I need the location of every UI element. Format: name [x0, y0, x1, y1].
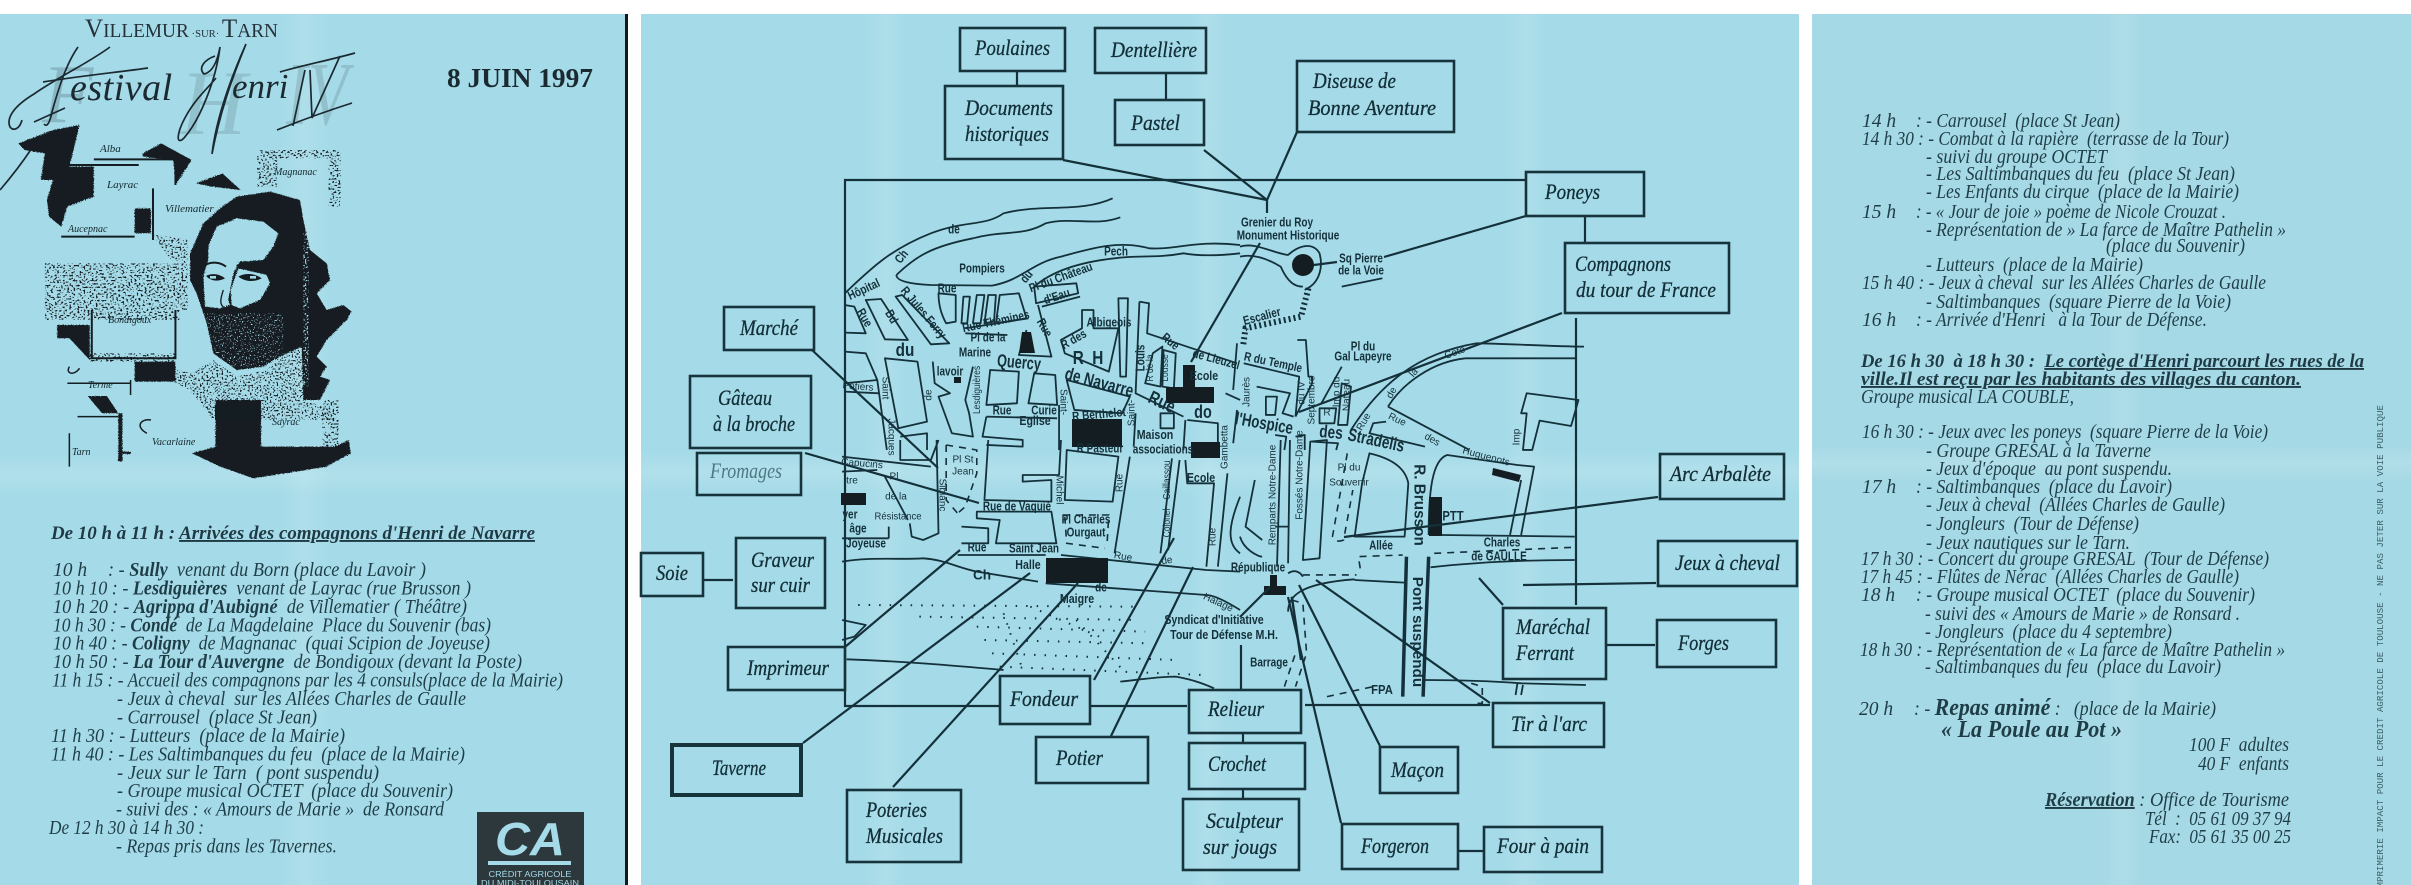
arrivals list: 10 h 10 : - Lesdiguières venant de Layrac (rue Brusson ) — [53, 578, 471, 599]
box: Documents historiques: historiques — [965, 121, 1049, 146]
map street labels: FPA — [1371, 683, 1393, 697]
box: Jeux à cheval — [1658, 541, 1797, 586]
late afternoon schedule: 17 h 45 : - Flûtes de Nérac (Allées Charles de Gaulle) — [1861, 567, 2239, 588]
map street labels: du — [1018, 268, 1036, 286]
map street labels: Escalier — [1242, 306, 1283, 328]
map street labels: yer — [843, 508, 858, 522]
village names: Villematier — [165, 203, 214, 215]
map street labels: Halage — [1201, 591, 1235, 615]
attraction labels — [641, 28, 1797, 872]
afternoon schedule: - Saltimbanques (square Pierre de la Voie) — [1926, 292, 2231, 313]
afternoon schedule: : - Carrousel (place St Jean) — [1916, 111, 2120, 132]
map street labels: Quercy — [996, 351, 1042, 375]
box: Soie: Soie — [656, 560, 688, 585]
map street labels: do — [1194, 401, 1212, 423]
map street labels: Maison — [1137, 428, 1173, 442]
map street labels: Monument Historique — [1237, 229, 1339, 243]
map street labels: Rue — [1145, 387, 1179, 417]
arrivals list: De 12 h 30 à 14 h 30 : — [48, 818, 204, 839]
morning programme text — [48, 523, 563, 858]
arrivals list: - Carrousel (place St Jean) — [117, 708, 317, 728]
arrivals list: 10 h 30 : - Condé de La Magdelaine Place du Souvenir (bas) — [53, 615, 491, 636]
map street labels: Pont suspendu — [1409, 577, 1425, 687]
street map — [842, 198, 1586, 703]
map street labels: R — [1323, 408, 1331, 418]
map street labels: R de la — [1145, 354, 1155, 381]
map street labels: Barrage — [1250, 656, 1288, 670]
map street labels: Saint Jean — [1009, 542, 1059, 556]
map street labels: Rue — [1113, 550, 1133, 564]
box: Potier: Potier — [1055, 745, 1103, 770]
arrivals list: 10 h 40 : - Coligny de Magnanac (quai Scipion de Joyeuse) — [53, 634, 490, 655]
late afternoon schedule: - Groupe GRESAL à la Taverne — [1926, 441, 2151, 462]
box: Gâteau à la broche — [690, 376, 811, 448]
map street labels: Jean — [952, 466, 974, 478]
festival title script — [0, 44, 355, 190]
arrivals list: 10 h 20 : - Agrippa d'Aubigné de Villematier ( Théâtre) — [53, 597, 467, 618]
map street labels: de Lieuzel — [1191, 347, 1241, 373]
map street labels: Louis — [1134, 345, 1148, 371]
map street labels: Fossés Notre-Dame — [1294, 430, 1306, 520]
map street labels: Rue — [854, 307, 874, 329]
box: Graveur sur cuir: sur cuir — [751, 572, 810, 597]
map street labels: l'Hospice — [1234, 409, 1295, 439]
map street labels: Septembre — [1306, 375, 1318, 424]
evening meal — [1859, 695, 2289, 775]
map street labels: la — [1407, 366, 1421, 380]
box: Graveur sur cuir — [736, 538, 825, 608]
map street labels: Pl St — [952, 454, 974, 466]
arrivals list: - Jeux sur le Tarn ( pont suspendu) — [117, 763, 379, 784]
map street labels: Albigeois — [1087, 316, 1131, 330]
procession heading: De 16 h 30 à 18 h 30 : Le cortège d'Henri parcourt les rues de la — [1860, 351, 2364, 372]
map street labels: Caillassou — [1162, 460, 1172, 500]
map street labels: Rue — [1208, 527, 1218, 546]
late afternoon schedule: 18 h — [1861, 585, 1895, 606]
map street labels: de la — [885, 492, 907, 502]
box: Imprimeur — [728, 647, 845, 690]
map street labels: Hôpital — [846, 277, 882, 303]
map street labels: Syndicat d'Initiative — [1164, 613, 1264, 627]
box: Arc Arbalète — [1660, 454, 1784, 499]
afternoon schedule: 15 h — [1862, 202, 1896, 223]
map frame — [845, 180, 1576, 706]
village names: Tarn — [72, 447, 91, 458]
box: Four à pain — [1484, 827, 1602, 872]
procession heading: ville.Il est reçu par les habitants des villages du canton. — [1861, 369, 2301, 390]
map street labels: Lesdiguières — [972, 366, 982, 414]
map street labels: R du Temple — [1243, 350, 1303, 376]
map street labels: Rue — [938, 282, 956, 296]
logo: Crédit Agricole du Midi-Toulousain — [477, 812, 584, 885]
box: Forges: Forges — [1677, 630, 1729, 655]
late afternoon schedule: - suivi des « Amours de Marie » de Ronsard . — [1925, 604, 2240, 625]
box: Forgeron — [1342, 824, 1458, 869]
map street labels: R. Brusson — [1411, 464, 1427, 546]
box: Crochet: Crochet — [1208, 751, 1267, 776]
box: Maréchal Ferrant — [1503, 608, 1606, 679]
map street labels: Rue Thémines — [961, 308, 1031, 336]
box: Sculpteur sur jougs — [1183, 799, 1299, 870]
map street labels: Maigre — [1060, 592, 1095, 606]
map street labels: Rue — [1034, 317, 1054, 339]
box: Sculpteur sur jougs: Sculpteur — [1206, 808, 1283, 833]
map street labels: Nateau — [1342, 379, 1352, 411]
box: Tir à l'arc — [1493, 703, 1604, 747]
map street labels: Siblanc — [936, 479, 948, 511]
map street labels: tre — [846, 476, 858, 486]
reservation contact — [2044, 790, 2291, 848]
map street labels: Ch — [893, 248, 911, 266]
map street labels: Pl du Château — [1027, 260, 1095, 296]
box: Compagnons du tour de France — [1565, 243, 1729, 313]
box: Poulaines — [960, 28, 1065, 71]
map street labels: Pompiers — [959, 262, 1005, 276]
map street labels: Lousse — [1160, 354, 1170, 382]
map street labels: Grenier du Roy — [1241, 216, 1314, 230]
map street labels: Ourgaut — [1067, 526, 1106, 540]
map street labels: Pl de la — [971, 331, 1006, 345]
box: Jeux à cheval: Jeux à cheval — [1675, 550, 1780, 575]
festival title script: F — [41, 48, 95, 141]
map street labels: de la Voie — [1338, 264, 1384, 278]
village names — [67, 143, 317, 458]
map street labels: Curie — [1031, 404, 1057, 418]
panel: festival cover and morning programme — [0, 14, 628, 885]
reservation contact: Fax: 05 61 35 00 25 — [2148, 827, 2291, 848]
map street labels: du — [896, 340, 914, 360]
village names: Layrac — [106, 179, 138, 191]
evening meal: 20 h — [1859, 699, 1893, 720]
arrivals list: - suivi des : « Amours de Marie » de Ronsard — [116, 800, 444, 821]
map street labels: R Berthelot — [1072, 406, 1127, 424]
box: Poteries Musicales: Musicales — [865, 823, 943, 848]
map street labels: Sq Pierre — [1339, 252, 1383, 266]
map street labels: de Navarre — [1063, 365, 1136, 401]
map street labels: Stradelis — [1346, 426, 1406, 456]
box: Maçon — [1380, 747, 1458, 793]
arrivals list — [48, 560, 563, 858]
late afternoon schedule: 16 h 30 : - Jeux avec les poneys (square Pierre de la Voie) — [1862, 422, 2268, 443]
village names: Terme — [88, 380, 113, 391]
box: Poteries Musicales — [847, 790, 961, 862]
festival title script: H — [179, 52, 251, 154]
map street labels: Pl du — [1338, 462, 1360, 474]
evening meal: 100 F adultes — [2189, 735, 2289, 756]
box: Fondeur — [1000, 676, 1090, 724]
map street labels: R Pasteur — [1077, 442, 1124, 456]
map street labels: Souvenir — [1329, 478, 1369, 488]
arrivals list: - Repas pris dans les Tavernes. — [116, 836, 337, 858]
map street labels: Gambetta — [1220, 425, 1230, 469]
map street labels: Résistance — [875, 511, 921, 523]
box: Fondeur: Fondeur — [1009, 686, 1078, 711]
box: Graveur sur cuir: Graveur — [751, 547, 814, 572]
panel: afternoon and evening programme — [1812, 14, 2411, 885]
arrivals list: - Jeux à cheval sur les Allées Charles de Gaulle — [117, 689, 466, 710]
late afternoon schedule — [1860, 422, 2285, 678]
evening meal: : - Repas animé : (place de la Mairie) — [1914, 695, 2216, 721]
map street labels: âge — [849, 522, 867, 536]
box: Poulaines: Poulaines — [974, 35, 1050, 60]
head, beard and ruff — [170, 192, 352, 420]
arrivals list: - Groupe musical OCTET (place du Souvenir) — [117, 781, 453, 802]
logo: Crédit Agricole du Midi-Toulousain: CA — [495, 813, 565, 865]
village names: Sayrac — [272, 417, 300, 428]
afternoon schedule: - Représentation de » La farce de Maître Pathelin » — [1926, 220, 2286, 241]
afternoon schedule: - Les Enfants du cirque (place de la Mairie) — [1926, 182, 2239, 203]
map street labels: Marine — [959, 346, 991, 360]
arrivals list: 11 h 30 : - Lutteurs (place de la Mairie) — [51, 726, 345, 747]
map street labels: Ecole — [1187, 471, 1216, 485]
map street labels: Pl — [890, 472, 898, 482]
box: Arc Arbalète: Arc Arbalète — [1668, 461, 1771, 486]
evening meal: « La Poule au Pot » — [1941, 717, 2122, 743]
box: Documents historiques: Documents — [964, 95, 1053, 120]
afternoon schedule: - suivi du groupe OCTET — [1926, 147, 2108, 168]
map street labels: Halle — [1015, 558, 1041, 572]
box: Gâteau à la broche: Gâteau — [718, 385, 772, 410]
map street labels: associations — [1133, 443, 1193, 457]
box: Pastel — [1115, 100, 1204, 145]
afternoon schedule: (place du Souvenir) — [2106, 236, 2245, 257]
panel: town map with attraction labels — [641, 14, 1799, 885]
village names: Bondigoux — [108, 315, 152, 326]
map street labels: République — [1231, 561, 1285, 575]
map street labels: Rue — [1159, 331, 1181, 353]
box: Maçon: Maçon — [1390, 757, 1444, 782]
village sketch and torn-paper texture — [45, 150, 341, 447]
map street labels: Pl du — [1351, 340, 1375, 354]
box: Diseuse de Bonne Aventure: Diseuse de — [1312, 68, 1396, 93]
logo: Crédit Agricole du Midi-Toulousain: CRÉDIT AGRICOLE — [488, 869, 572, 879]
box: Fromages: Fromages — [709, 458, 782, 483]
festival title script: estival — [70, 67, 173, 109]
map street labels: Potiers — [842, 380, 874, 394]
box: Maréchal Ferrant: Ferrant — [1515, 640, 1575, 665]
box: Soie — [641, 553, 703, 596]
afternoon schedule: : - Arrivée d'Henri à la Tour de Défense. — [1916, 310, 2207, 331]
map street labels: Imp du — [1332, 377, 1342, 407]
box: Pastel: Pastel — [1130, 110, 1180, 135]
map street labels: Pl Charles — [1062, 513, 1110, 527]
village names: Aucepnac — [67, 224, 108, 235]
afternoon schedule: 14 h — [1862, 111, 1896, 132]
village names: Vacarlaine — [152, 437, 196, 448]
arrivals list: : - Sully venant du Born (place du Lavoir ) — [108, 560, 426, 581]
afternoon schedule: 14 h 30 : - Combat à la rapière (terrasse de la Tour) — [1862, 129, 2229, 150]
afternoon schedule: : - « Jour de joie » poème de Nicole Crouzat . — [1916, 202, 2226, 223]
map street labels: Remparts Notre-Dame — [1268, 444, 1278, 545]
map street labels: Pech — [1104, 245, 1128, 259]
map street labels: Saint- — [1126, 400, 1138, 426]
map street labels: Rue de Vaquié — [983, 500, 1051, 514]
late afternoon schedule: - Jeux nautiques sur le Tarn. — [1926, 533, 2130, 554]
late afternoon schedule: - Saltimbanques du feu (place du Lavoir) — [1925, 657, 2221, 678]
map street labels: Jaurès — [1242, 377, 1252, 407]
afternoon schedule — [1862, 111, 2286, 331]
connector lines — [703, 71, 1658, 851]
box: Marché: Marché — [739, 315, 799, 340]
arrivals list: 11 h 40 : - Les Saltimbanques du feu (place de la Mairie) — [51, 744, 465, 765]
map street labels: R des — [1059, 327, 1089, 353]
box: Taverne: Taverne — [712, 755, 766, 780]
afternoon schedule: 15 h 40 : - Jeux à cheval sur les Allées Charles de Gaulle — [1862, 273, 2266, 294]
map street labels: PTT — [1442, 508, 1464, 524]
map street labels: Ecole — [1190, 369, 1219, 383]
arrivals list: 11 h 15 : - Accueil des compagnons par les 4 consuls(place de la Mairie) — [52, 671, 563, 692]
box: Poteries Musicales: Poteries — [865, 797, 927, 822]
box: Fromages — [697, 453, 801, 495]
map street labels: Allée — [1369, 539, 1393, 553]
box: Forges — [1657, 620, 1776, 667]
map street labels: Imp — [1512, 428, 1522, 445]
box: Diseuse de Bonne Aventure: Bonne Aventure — [1308, 95, 1436, 120]
map street labels: Jacques — [886, 418, 896, 456]
box: Diseuse de Bonne Aventure — [1297, 61, 1454, 132]
town name: VILLEMUR ·SUR· TARN — [85, 14, 278, 43]
late afternoon schedule: - Jeux à cheval (Allées Charles de Gaulle) — [1926, 495, 2225, 516]
village names: Alba — [99, 143, 121, 155]
map street labels: de — [924, 389, 934, 401]
evening meal: 40 F enfants — [2198, 754, 2289, 775]
map buildings — [841, 254, 1521, 595]
map street labels: Côte — [1443, 344, 1467, 362]
map street labels: Michel — [1054, 476, 1064, 504]
festival title script: enri — [232, 67, 288, 106]
festival title script: IV — [285, 45, 355, 144]
map street labels: Eglise — [1019, 414, 1051, 428]
box: Maréchal Ferrant: Maréchal — [1515, 614, 1590, 639]
box: Poneys: Poneys — [1544, 179, 1600, 204]
map street labels: de — [1384, 385, 1400, 401]
late afternoon schedule: - Jeux d'époque au pont suspendu. — [1926, 459, 2172, 480]
reservation contact: Réservation : Office de Tourisme — [2044, 790, 2289, 811]
map street labels: Joyeuse — [846, 537, 886, 551]
map street labels: lavoir — [937, 365, 964, 379]
map street labels: Bd — [882, 308, 900, 326]
late afternoon schedule: : - Saltimbanques (place du Lavoir) — [1916, 477, 2172, 498]
map street labels: du IV — [1296, 381, 1308, 405]
map street labels: d'Eau — [1042, 287, 1072, 307]
box: Dentellière: Dentellière — [1110, 37, 1197, 62]
date: 8 JUIN 1997 — [447, 63, 593, 93]
afternoon schedule: 16 h — [1862, 310, 1896, 331]
box: Compagnons du tour de France: du tour de France — [1576, 277, 1716, 302]
map street labels: des — [1319, 422, 1344, 444]
box: Relieur — [1189, 690, 1301, 733]
map street labels: de GAULLE — [1471, 550, 1527, 564]
box: Four à pain: Four à pain — [1496, 833, 1589, 858]
late afternoon schedule: 18 h 30 : - Représentation de « La farce de Maître Pathelin » — [1860, 640, 2285, 661]
box: Forgeron: Forgeron — [1360, 833, 1429, 858]
map street labels: Ch — [973, 567, 991, 583]
map street labels: Charles — [1484, 536, 1520, 550]
box: Potier — [1036, 737, 1148, 783]
late afternoon schedule: 17 h 30 : - Concert du groupe GRESAL (Tour de Défense) — [1861, 549, 2269, 570]
late afternoon schedule: 17 h — [1862, 477, 1896, 498]
box: Dentellière — [1095, 28, 1206, 73]
box: Compagnons du tour de France: Compagnons — [1575, 251, 1671, 276]
box: Marché — [724, 307, 814, 350]
box: Imprimeur: Imprimeur — [746, 655, 829, 680]
printer note: IMPRIMERIE IMPACT POUR LE CREDIT AGRICOLE DE TOULOUSE - NE PAS JETER SUR LA VOIE PUBLIQUE — [2375, 405, 2386, 885]
map street labels: de — [1095, 581, 1107, 595]
procession heading: Groupe musical LA COUBLE, — [1861, 387, 2074, 408]
map street labels: Saint- — [1058, 389, 1068, 415]
procession heading — [1860, 351, 2364, 408]
map street labels: Tour de Défense M.H. — [1170, 628, 1278, 642]
box: Documents historiques — [945, 86, 1063, 159]
reservation contact: Tél : 05 61 09 37 94 — [2145, 809, 2291, 830]
village names: Magnanac — [273, 167, 317, 178]
late afternoon schedule: - Jongleurs (Tour de Défense) — [1926, 514, 2139, 535]
box: Tir à l'arc: Tir à l'arc — [1511, 711, 1587, 736]
map street labels: Rue — [1114, 473, 1126, 492]
box: Relieur: Relieur — [1207, 696, 1264, 721]
map street labels: Rue — [968, 541, 986, 555]
late afternoon schedule: - Jongleurs (place du 4 septembre) — [1925, 622, 2172, 643]
map street labels — [841, 216, 1527, 697]
afternoon schedule: - Lutteurs (place de la Mairie) — [1926, 255, 2143, 276]
map street labels: Rue — [993, 404, 1011, 418]
box: Poneys — [1526, 172, 1644, 216]
arrivals list: 10 h 50 : - La Tour d'Auvergne de Bondigoux (devant la Poste) — [53, 652, 522, 673]
map street labels: Saint — [880, 377, 890, 400]
portrait of Henri IV with map of villages — [18, 125, 352, 478]
afternoon schedule: - Les Saltimbanques du feu (place St Jean) — [1926, 164, 2235, 185]
map street labels: Colonel — [1162, 509, 1172, 537]
map street labels: de — [1161, 555, 1174, 567]
map street labels: R Jules Ferry — [898, 285, 949, 342]
map street labels: de — [948, 223, 960, 237]
map street labels: R H — [1073, 348, 1103, 368]
map street labels: Huguenots — [1461, 445, 1511, 469]
box: Gâteau à la broche: à la broche — [713, 411, 795, 436]
late afternoon schedule: : - Groupe musical OCTET (place du Souvenir) — [1916, 585, 2255, 606]
box: Taverne — [672, 745, 801, 795]
arrivals list: 10 h — [53, 560, 87, 581]
map street labels: Gal Lapeyre — [1334, 350, 1392, 364]
map street labels: Capucins — [841, 457, 883, 471]
map street labels: des — [1422, 431, 1442, 449]
box: Sculpteur sur jougs: sur jougs — [1203, 834, 1277, 859]
box: Crochet — [1189, 743, 1305, 789]
map street labels: Rue — [1355, 411, 1374, 433]
programme heading: De 10 h à 11 h : Arrivées des compagnons d'Henri de Navarre — [50, 523, 536, 544]
map street labels: Rue — [1386, 411, 1408, 429]
